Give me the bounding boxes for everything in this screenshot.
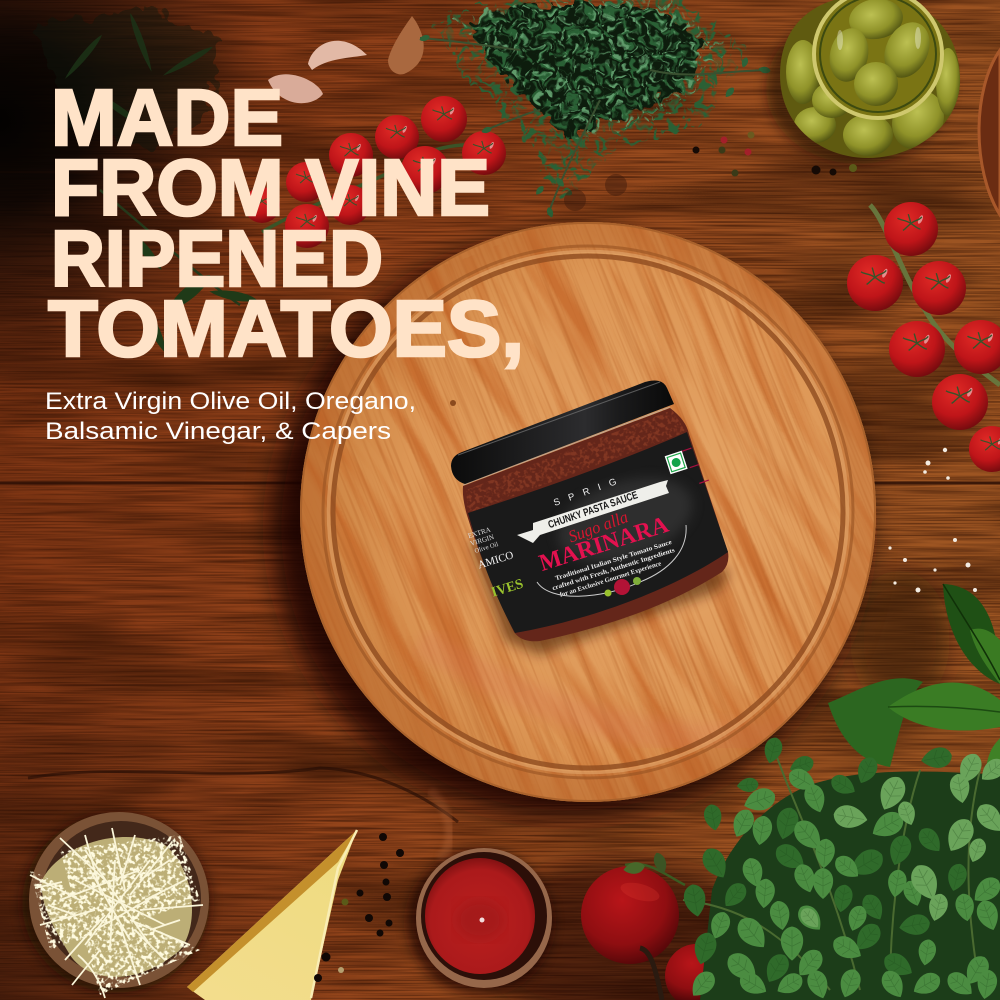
- right side label marks: [682, 446, 709, 486]
- side label text: EXTRA: [467, 526, 492, 540]
- right edge board fragment: [979, 50, 1000, 215]
- jar label: [468, 432, 728, 633]
- headline: TOMATOES,: [48, 284, 524, 373]
- ingredient subtext: Balsamic Vinegar, & Capers: [45, 418, 391, 445]
- dark oregano leaves: [682, 735, 969, 987]
- side label text: IVES: [490, 577, 526, 601]
- garlic cloves: [268, 16, 424, 103]
- cherry tomatoes on vine, top: [244, 96, 506, 248]
- side label text: VIRGIN: [469, 533, 495, 548]
- ribbon banner: [517, 480, 669, 543]
- basil leaves: [828, 584, 1000, 800]
- flavour name: MARINARA: [536, 512, 672, 577]
- headline: RIPENED: [51, 214, 383, 303]
- cheese wedge: [187, 830, 357, 1000]
- ingredient subtext: [45, 388, 416, 445]
- tomato sauce bowl: [408, 848, 552, 994]
- description: Traditional Italian Style Tomato Sauce: [554, 539, 673, 582]
- headline: FROM VINE: [51, 143, 490, 232]
- description: crafted with Fresh, Authentic Ingredients: [551, 547, 676, 592]
- tomato emblem: [604, 577, 641, 596]
- scattered salt crystals: [888, 448, 977, 592]
- ingredient subtext: Extra Virgin Olive Oil, Oregano,: [45, 388, 416, 415]
- description: [551, 539, 676, 599]
- herb: dark arugula top-left: [35, 8, 257, 355]
- headline: MADE: [51, 73, 283, 162]
- oregano bunch bottom-right: [682, 735, 1000, 1000]
- black pepper scatter: [314, 833, 404, 982]
- grated cheese bowl: [22, 812, 210, 998]
- large tomatoes bottom: [581, 851, 729, 1000]
- side label text: AMICO: [476, 549, 515, 571]
- jar shadow: [470, 540, 730, 655]
- mid oregano leaves: [686, 765, 1000, 1000]
- side label text: Olive Oil: [474, 541, 499, 555]
- jar lid: [451, 380, 674, 484]
- peppercorns top: [564, 132, 857, 211]
- headline: [48, 73, 524, 373]
- description: for an Exclusive Gourmet Experience: [559, 560, 662, 599]
- jar body with sauce: [463, 408, 728, 641]
- cutting board: [253, 216, 888, 840]
- swirl decoration: [537, 525, 686, 596]
- brand name: SPRIG: [552, 476, 618, 509]
- thyme sprigs top: [419, 0, 771, 218]
- light oregano leaves: [797, 750, 1000, 932]
- cherry tomatoes on vine, right: [847, 202, 1000, 472]
- olive jar: [766, 0, 960, 164]
- cheese shreds: [30, 828, 203, 998]
- flavour script: Sugo alla: [566, 507, 630, 546]
- side label text: [467, 521, 526, 602]
- veg mark: [665, 451, 688, 474]
- sauce jar: CHUNKY PASTA SAUCE: [547, 489, 639, 531]
- sauce jar: [451, 380, 730, 655]
